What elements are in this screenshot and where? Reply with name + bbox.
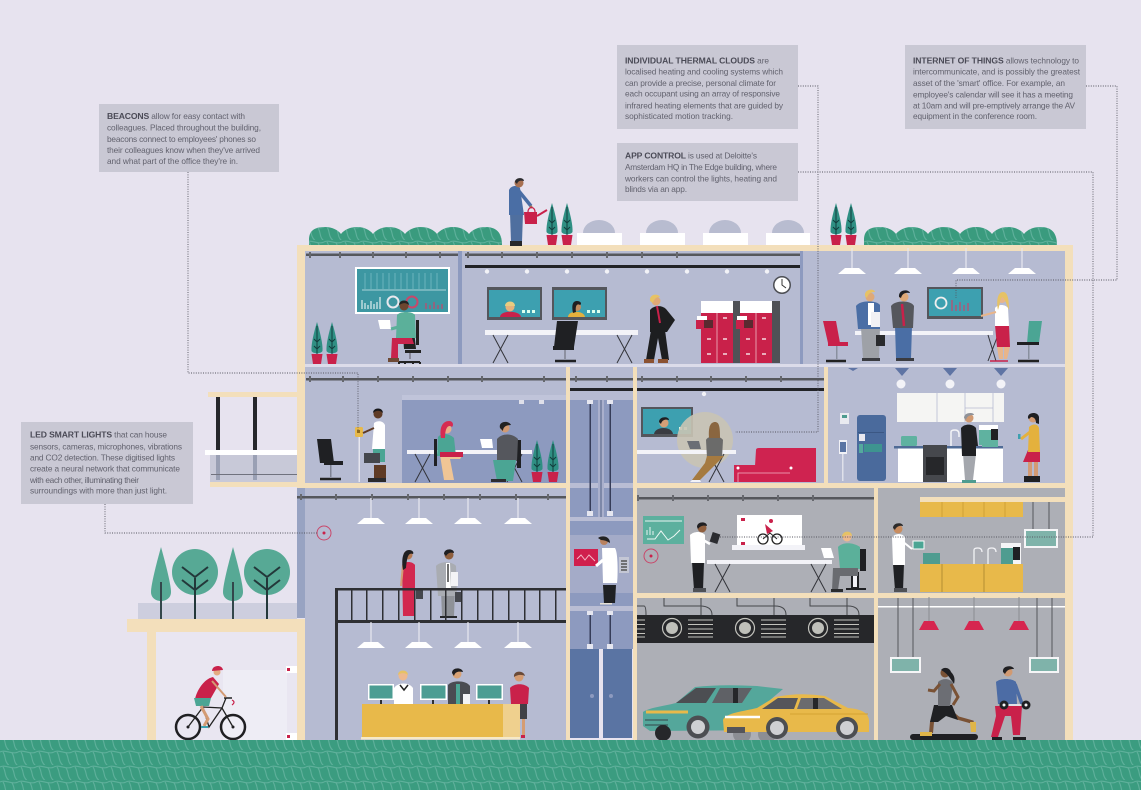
callout: beacons: BEACONS allow for easy contact with [107,111,245,121]
red chair [823,321,848,361]
callout: internet of things: intercommunicate, and is possibly the greatest [913,67,1081,77]
lab bench with appliances [920,543,1023,592]
black office chair [317,439,343,479]
person: man with folder and briefcase [856,290,885,361]
person: man in gray sweater [480,422,521,482]
person: man in dark suit [644,295,675,363]
icon: plant pair [546,203,573,245]
mezzanine railing [335,588,566,740]
pendant lamps: upper [357,498,532,524]
callout: beacons: colleagues. Placed throughout the building, [107,123,261,133]
video screen: man [641,407,693,437]
person: woman with red hair [434,421,463,480]
icon: skylights [577,220,810,245]
person: receptionist right [510,672,529,738]
person: lab technician [892,523,924,592]
callout: LED smart lights: surroundings with more than just light. [30,486,167,496]
ventilation duct [637,615,874,643]
callout: beacons [99,104,279,172]
callout: internet of things: equipment in the conference room. [913,111,1037,121]
icon: round tree [172,549,218,619]
callout: individual thermal clouds: INDIVIDUAL THERMAL CLOUDS are [625,55,769,65]
ceiling pipes [637,598,859,615]
panel: car park [637,598,874,743]
panel: garden terrace and bike garage [127,547,305,740]
callout: LED smart lights: with each other, illuminating their [29,475,139,485]
person: man lifting dumbbell [991,666,1030,740]
panel: top floor [306,248,1042,364]
callout: individual thermal clouds: sophisticated motion tracking. [625,111,733,121]
ceiling spot lights [848,368,1008,388]
person: runner on treadmill [910,668,978,740]
callout: individual thermal clouds [617,45,798,129]
icon: plant pair [830,203,857,245]
dotted connector: LED smart lights [105,504,317,533]
person: man at beacon with briefcase [363,408,386,482]
yellow wall cabinets [920,497,1065,517]
person: woman in red dress [401,550,423,616]
panel: middle floor [306,368,1040,483]
callout: individual thermal clouds: localised heating and cooling systems which [625,67,783,77]
callout: LED smart lights [21,422,193,504]
callout: internet of things: at 10am and will pre-emptively arrange the AV [913,100,1075,110]
callout: beacons: their colleagues know when they've arrived [107,145,260,155]
yellow car [723,694,869,739]
panel: left balcony [205,392,297,487]
smart light sensor [644,549,658,563]
person: man with tablet [690,522,720,592]
icon: cone tree [223,547,243,619]
ground with leaf pattern [0,740,1141,790]
demo table [707,560,832,592]
pendant lamps: lower [357,622,532,648]
icon: lift keypad [619,557,629,573]
panel: gym [878,597,1065,740]
icon: clock [773,276,791,294]
thermal cloud glow [677,412,733,468]
callout: internet of things [905,45,1086,129]
callout: individual thermal clouds: can provide a precise, personal climate for [625,78,776,88]
callout: app control: APP CONTROL is used at Deloitte's [625,151,757,161]
person: woman with phone [1018,413,1040,482]
whiteboard with bike demo [732,515,805,550]
person: man with red tie [891,290,914,361]
icon: round tree [244,549,290,619]
callout: internet of things: asset of the 'smart' office. For example, an [913,78,1065,88]
glass meeting room [402,395,566,483]
callout: LED smart lights: sensors, cameras, microphones, vibrations [30,441,182,451]
person: seated blond man [821,532,866,592]
hedge: right [864,227,1057,245]
person: gardener with watering can [509,178,547,246]
person: receptionist left [394,670,413,704]
callout: app control [617,143,798,201]
icon: plant pair [311,322,338,364]
panel: demo and lab room [637,495,1065,592]
callout: app control: Amsterdam HQ in The Edge building, where [625,162,777,172]
person: technician in lift [596,536,618,604]
callout: app control: workers can control the lights, heating and [624,173,777,183]
callout: app control: blinds via an app. [625,184,687,194]
video screen: woman [552,287,607,320]
pipes and track lighting [306,252,800,274]
hedge: left [309,227,502,245]
reception desk with monitors [361,684,520,740]
icon: beacon post [355,427,363,482]
data dashboard screen [355,267,450,314]
pipe [297,494,566,500]
callout: individual thermal clouds: each occupant using an array of responsive [625,89,780,99]
meeting table [485,330,638,363]
dotted connector: internet of things [956,86,1117,298]
icon: red lift display [574,549,598,566]
hanging screen [1024,502,1058,548]
panel: roof [309,178,1057,246]
crimson pendant lamps [919,597,1029,630]
hanging screens [890,598,1059,673]
callout: beacons: and what part of the office they're in. [107,156,238,166]
icon: plant pair [531,440,559,482]
panel: reception atrium [297,494,566,740]
person: man in gray suit [436,549,462,618]
dotted connector: thermal clouds [735,86,818,432]
video screen: man [487,287,542,320]
person: woman presenting [981,292,1010,361]
callout: individual thermal clouds: infrared heating elements that are guided by [625,100,784,110]
person: seated with laptop [378,300,421,364]
person: woman in thermal cloud [637,422,736,482]
callout: internet of things: employee's calendar will see it has a meeting [913,89,1073,99]
person: receptionist centre [448,668,470,704]
dotted connector: app control [720,172,1093,537]
dotted connector: beacons [188,172,358,430]
cyclist [176,666,245,739]
smart fridge [857,415,886,481]
person: man in kitchen [961,413,978,483]
conference table [855,331,998,361]
presentation screen [927,287,983,319]
office chair [553,321,578,361]
panel: lift shaft [570,367,633,738]
icon: cone tree [151,547,171,619]
filing cabinets [696,301,780,363]
callout: internet of things: INTERNET OF THINGS allows technology to [913,55,1079,65]
pipe [637,495,874,501]
chart display [643,516,684,544]
panel: building shell [297,245,1073,740]
pipes and track [306,376,824,396]
callout: LED smart lights: create a neural network that communicate [30,464,180,474]
LED smart light sensor [317,526,331,540]
callout: LED smart lights: and CO2 detection. These digitised lights [30,452,175,462]
callout: LED smart lights: LED SMART LIGHTS that can house [30,430,167,440]
kitchen units [894,393,1004,482]
teal chair [1017,321,1042,361]
pendant lamps [838,248,1036,274]
wall sensor and tablet [839,413,849,481]
red sofa [734,448,816,482]
teal car [643,685,783,743]
callout: beacons: beacons connect to employees' phones so [107,134,256,144]
